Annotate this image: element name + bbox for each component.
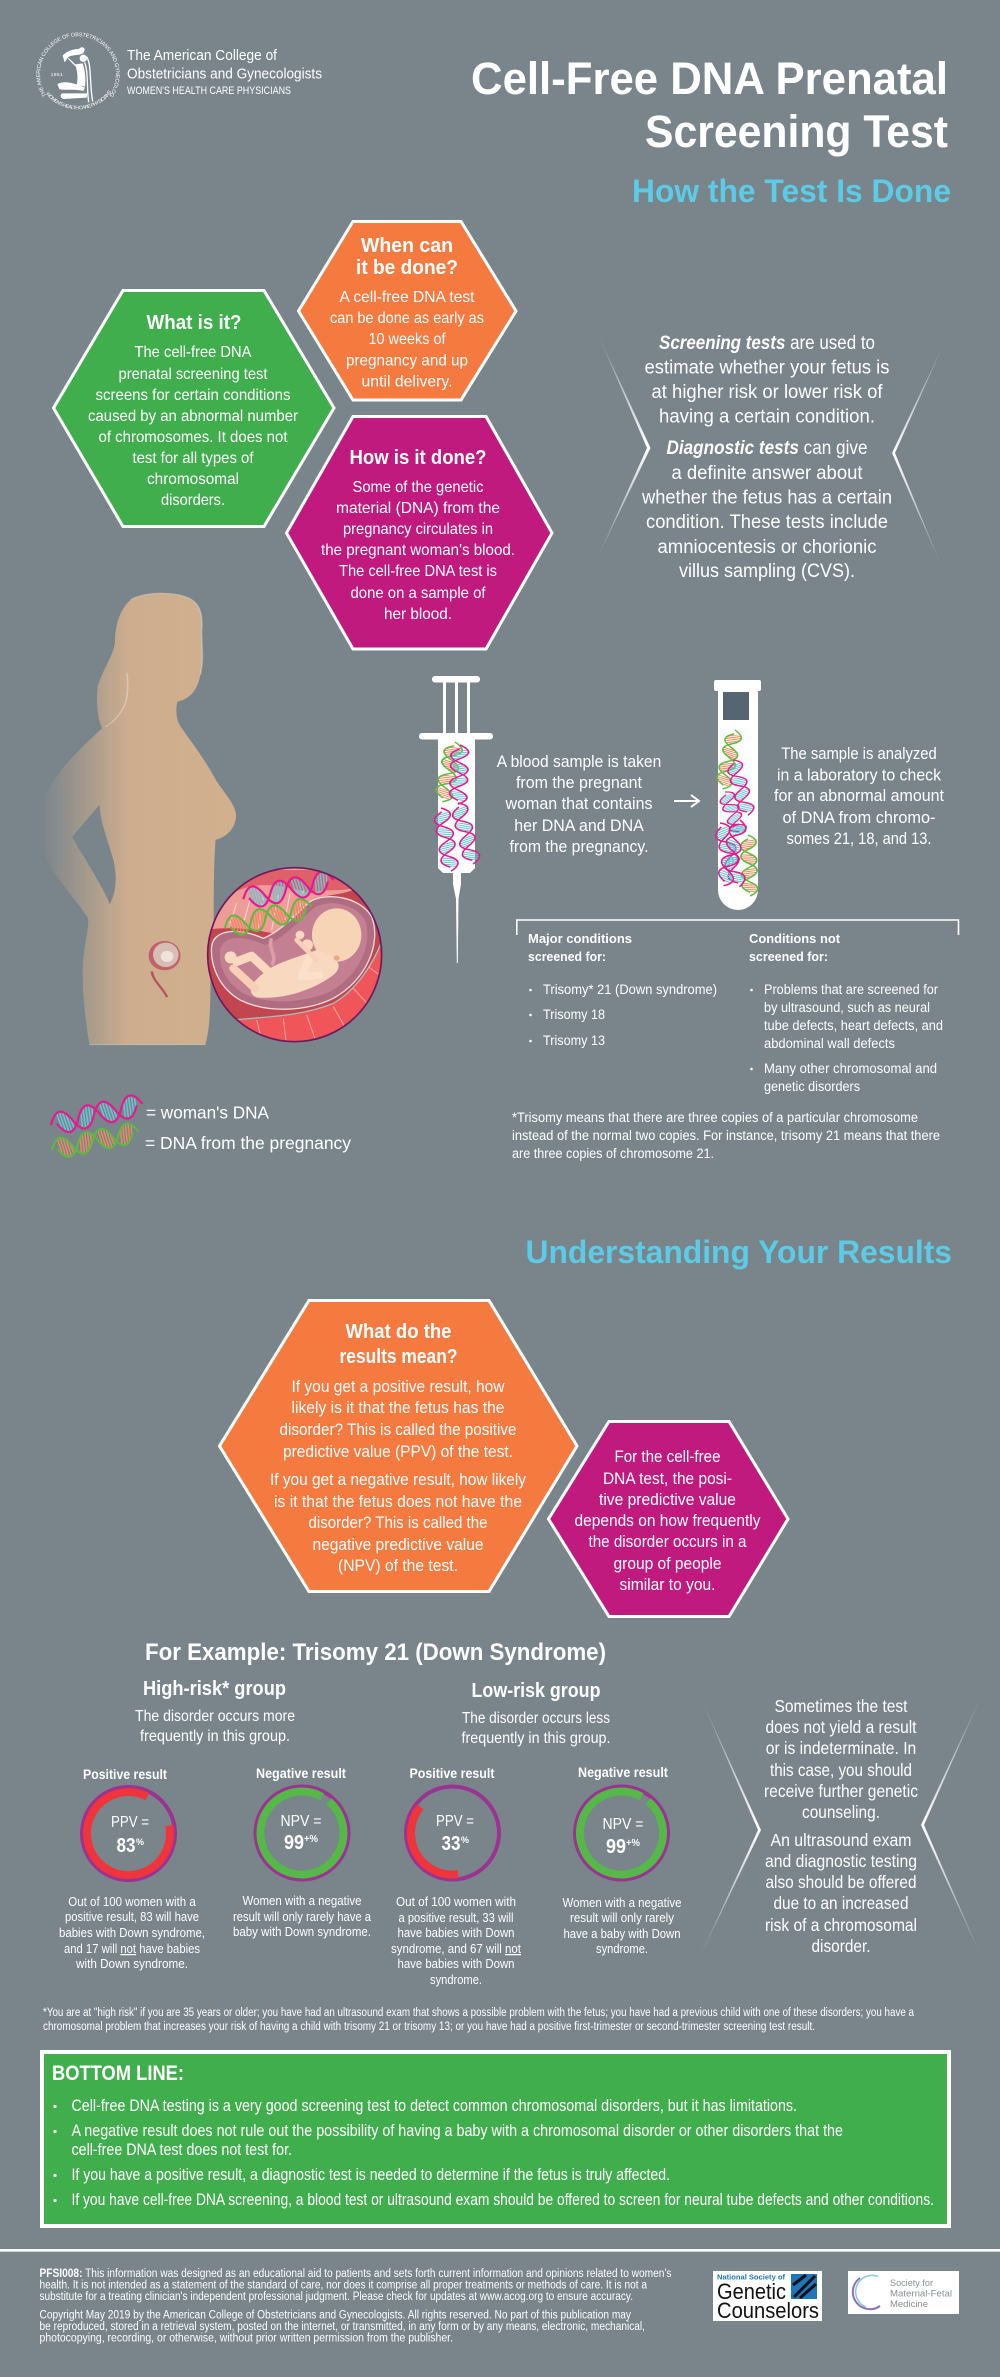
bullet points: Cell-free DNA testing is a very good screening test to detect common chromosomal disorders, but it has limitations. <box>72 2097 797 2115</box>
body text: test for all types of <box>132 450 254 467</box>
result: low risk negative: NPV = <box>602 1816 644 1833</box>
illustration: fetus in womb with DNA <box>206 866 382 1042</box>
result: high risk positive: % <box>136 1837 144 1847</box>
illustration: pregnant woman silhouette <box>40 593 236 1045</box>
body text: tive predictive value <box>599 1491 736 1509</box>
body text: The cell-free DNA <box>134 344 252 361</box>
pregnancy DNA label: = DNA from the pregnancy <box>145 1133 351 1153</box>
result: high risk negative: 99 <box>284 1832 304 1854</box>
result: low risk positive: 33 <box>442 1833 460 1855</box>
description: a positive result, 33 will <box>398 1911 514 1925</box>
description: result will only rarely <box>570 1911 675 1925</box>
screening text: at higher risk or lower risk of <box>652 382 883 403</box>
heading: results mean? <box>340 1346 458 1368</box>
magenta hexagon <box>548 1422 788 1616</box>
footnote: high risk <box>43 2007 915 2033</box>
text: blood sample <box>497 753 661 856</box>
description: positive result, 83 will have <box>65 1910 199 1924</box>
text: blood sample: her DNA and DNA <box>514 817 644 835</box>
body text: For the cell-free <box>614 1448 720 1466</box>
description <box>562 1896 682 1956</box>
screening text: estimate whether your fetus is <box>644 358 890 378</box>
donut: NPV 99 low risk <box>563 1775 680 1891</box>
logo: ACOG: Obstetricians and Gynecologists <box>127 66 322 82</box>
green helix swatch <box>50 1122 141 1160</box>
body text: pregnancy and up <box>346 352 468 370</box>
text: blood sample: from the pregnant <box>516 774 642 792</box>
body text: the pregnant woman's blood. <box>321 542 515 559</box>
body text: the disorder occurs in a <box>588 1533 747 1551</box>
logo: National Society of Genetic Counselors: Counselors <box>717 2298 819 2323</box>
body text: until delivery. <box>362 374 452 390</box>
diagnostic text: condition. These tests include <box>646 512 888 533</box>
orange hexagon <box>220 1300 577 1592</box>
diagnostic text: Diagnostic tests can give <box>666 438 868 459</box>
seal ring text: motto: WOMEN'S HEALTH CARE PHYSICIANS <box>46 90 111 110</box>
body text: her blood. <box>384 606 452 623</box>
column: major conditions: Trisomy 18 <box>543 1007 605 1022</box>
fetus <box>225 908 361 998</box>
column: major conditions: Trisomy 13 <box>543 1033 605 1048</box>
column: major conditions: Trisomy* 21 (Down syndrome) <box>543 982 717 997</box>
screening text: having a certain condition. <box>659 406 875 428</box>
text: sample analyzed: The sample is analyzed <box>781 745 937 763</box>
result: low risk negative: +% <box>626 1838 640 1849</box>
description <box>59 1895 205 1971</box>
footer: disclaimer <box>40 2268 672 2345</box>
logo: National Society of Genetic Counselors <box>713 2271 822 2323</box>
result: low risk positive <box>391 1766 521 1987</box>
body text: 10 weeks of <box>368 331 446 348</box>
donut: NPV 99 <box>244 1775 360 1891</box>
footer: disclaimer: photocopying, recording, or otherwise, without prior written permission from the publisher. <box>40 2333 453 2345</box>
bullet points: cell-free DNA test does not test for. <box>72 2141 292 2159</box>
top tissue <box>212 868 352 933</box>
left chevron <box>696 1692 761 1965</box>
logo seal: 1951 <box>51 72 63 78</box>
column: conditions not screened: Conditions not <box>749 931 841 946</box>
body: PPV: If you get a positive result, how <box>292 1378 505 1396</box>
diagnostic text: villus sampling (CVS). <box>679 561 855 582</box>
description: Women with a negative <box>242 1894 362 1908</box>
body text: also should be offered <box>766 1872 916 1892</box>
text: blood sample: A blood sample is taken <box>497 753 661 771</box>
column: conditions not screened: by ultrasound, such as neural <box>764 1000 930 1015</box>
bullet points: A negative result does not rule out the possibility of having a baby with a chromosomal disorder or other disorders that the <box>72 2122 843 2140</box>
result: low risk negative <box>562 1765 682 1956</box>
group header: low risk <box>462 1680 610 1747</box>
bullet points: If you have a positive result, a diagnostic test is needed to determine if the fetus is truly affected. <box>72 2166 670 2184</box>
heading: When can <box>361 235 453 257</box>
column: conditions not screened: Many other chromosomal and <box>764 1061 937 1076</box>
result: low risk positive: Positive result <box>410 1766 495 1781</box>
body text: caused by an abnormal number <box>88 408 299 425</box>
group header: high risk <box>135 1678 295 1745</box>
heading <box>340 1321 458 1368</box>
result: low risk negative: 99 <box>606 1836 626 1858</box>
footnote: high risk: chromosomal problem that increases your risk of having a child with trisomy 21 or trisomy 13; or you have had a positive first-trimester or second-trimester screening test result. <box>43 2021 815 2033</box>
body text: and diagnostic testing <box>765 1851 917 1871</box>
body text: Some of the genetic <box>352 479 484 496</box>
logo seal <box>51 47 93 102</box>
green box <box>42 2052 949 2226</box>
body: PPV: disorder? This is called the positive <box>280 1421 516 1439</box>
screening text <box>644 333 890 428</box>
result: high risk negative <box>233 1766 371 1939</box>
body text: disorder. <box>812 1936 870 1956</box>
heading: it be done? <box>356 257 458 279</box>
body text: this case, you should <box>770 1760 912 1780</box>
amniotic sac <box>211 897 375 1009</box>
description: Out of 100 women with a <box>68 1895 196 1909</box>
column: conditions not screened <box>749 931 943 1094</box>
heading: What is it? <box>146 312 242 334</box>
heading: how the test is done: How the Test Is Done <box>632 173 951 209</box>
pink helix swatch <box>49 1093 145 1136</box>
footnote: trisomy: instead of the normal two copies. For instance, trisomy 21 means that there <box>512 1128 940 1143</box>
bullet points <box>53 2097 934 2209</box>
left chevron <box>595 330 650 563</box>
description <box>233 1894 371 1939</box>
heading: BOTTOM LINE: <box>52 2062 184 2085</box>
woman's DNA label: = woman's DNA <box>146 1102 269 1122</box>
description: syndrome. <box>596 1942 648 1956</box>
panel: what is it <box>54 290 334 526</box>
panel: when can it be done <box>298 222 516 400</box>
body text <box>88 344 299 509</box>
title: Screening Test <box>645 106 948 157</box>
body text: does not yield a result <box>766 1717 917 1737</box>
body: NPV: If you get a negative result, how likely <box>270 1471 527 1489</box>
bracket <box>517 920 958 935</box>
description: syndrome, and 67 will not <box>391 1942 521 1956</box>
body text <box>764 1696 918 1956</box>
umbilical cord <box>270 938 274 965</box>
heading: How is it done? <box>350 447 486 469</box>
heading: understanding your results: Understanding Your Results <box>526 1234 952 1270</box>
body text: screens for certain conditions <box>96 387 290 404</box>
diagnostic text: a definite answer about <box>672 463 863 484</box>
logo: Society for Maternal-Fetal Medicine: Maternal-Fetal <box>890 2288 952 2298</box>
panel: bottom line <box>42 2052 949 2226</box>
panel: how is it done <box>286 416 552 649</box>
body text: The cell-free DNA test is <box>339 563 497 580</box>
magenta hexagon <box>286 416 552 649</box>
result: high risk positive: 83 <box>116 1835 136 1857</box>
logo: Society for Maternal-Fetal Medicine: Society for <box>890 2278 933 2288</box>
body text: or is indeterminate. In <box>766 1738 916 1758</box>
description: have a baby with Down <box>564 1927 681 1941</box>
body text: due to an increased <box>774 1893 908 1913</box>
body text: done on a sample of <box>350 585 486 602</box>
right chevron <box>892 337 947 572</box>
description: and 17 will not have babies <box>64 1942 200 1956</box>
body: PPV <box>280 1378 516 1461</box>
body: NPV: (NPV) of the test. <box>338 1557 458 1575</box>
body text: An ultrasound exam <box>770 1830 912 1850</box>
body text: depends on how frequently <box>574 1512 761 1530</box>
green hexagon <box>54 290 334 526</box>
body text: pregnancy circulates in <box>343 521 493 538</box>
body: NPV <box>270 1471 527 1575</box>
group header: high risk: The disorder occurs more <box>135 1708 295 1725</box>
body text: A cell-free DNA test <box>340 289 475 306</box>
description: Out of 100 women with <box>396 1895 516 1909</box>
body text: chromosomal <box>147 471 239 488</box>
description <box>391 1895 521 1987</box>
panel: conditions lists <box>517 920 958 1094</box>
body: PPV: predictive value (PPV) of the test. <box>283 1443 513 1461</box>
description: babies with Down syndrome, <box>59 1926 205 1940</box>
arrow <box>674 795 699 807</box>
icon: syringe <box>419 676 493 963</box>
donut: PPV 33 <box>406 1786 499 1880</box>
footer: disclaimer: substitute for a treating clinician's independent professional judgment. Please check for updates at www.acog.org to ensure accuracy. <box>40 2291 633 2303</box>
title: Cell-Free DNA Prenatal <box>471 53 948 104</box>
logo: Society for Maternal-Fetal Medicine: Medicine <box>890 2299 928 2309</box>
footnote: trisomy: *Trisomy means that there are three copies of a particular chromosome <box>512 1110 918 1125</box>
orange hexagon <box>298 222 516 400</box>
logo: National Society of Genetic Counselors: National Society of <box>717 2272 786 2282</box>
panel: indeterminate results <box>696 1688 985 1965</box>
column: major conditions: Major conditions <box>528 931 632 946</box>
diagnostic text: whether the fetus has a certain <box>641 488 892 508</box>
footer: disclaimer: health. It is not intended as a statement of the standard of care, nor does it comprise all proper treatments or methods of care. It is not a <box>40 2280 648 2292</box>
body: NPV: negative predictive value <box>312 1536 484 1554</box>
result: high risk positive: PPV = <box>111 1814 149 1831</box>
group header: low risk: The disorder occurs less <box>462 1710 610 1727</box>
panel: what do the results mean <box>220 1300 577 1592</box>
result: high risk negative: NPV = <box>280 1813 322 1830</box>
panel: positive predictive value depends <box>548 1422 788 1616</box>
body text: Sometimes the test <box>774 1696 908 1716</box>
group header: high risk: frequently in this group. <box>140 1728 290 1745</box>
group header: low risk: frequently in this group. <box>462 1730 610 1747</box>
body text: material (DNA) from the <box>336 500 500 517</box>
body text: can be done as early as <box>330 310 484 327</box>
result: low risk negative: Negative result <box>578 1765 668 1780</box>
body text: counseling. <box>802 1802 880 1822</box>
column: conditions not screened: Problems that are screened for <box>764 982 938 997</box>
footer: disclaimer: Copyright May 2019 by the American College of Obstetricians and Gynecologists. All rights reserved. No part of this publication may <box>40 2310 631 2322</box>
column: conditions not screened: tube defects, heart defects, and <box>764 1018 943 1033</box>
description: baby with Down syndrome. <box>233 1925 371 1939</box>
description: Women with a negative <box>562 1896 682 1910</box>
result: high risk positive: Positive result <box>83 1767 167 1782</box>
body: NPV: disorder? This is called the <box>308 1514 488 1532</box>
group header: high risk: High-risk* group <box>143 1678 286 1700</box>
logo: ACOG <box>36 32 322 110</box>
body text: receive further genetic <box>764 1781 918 1801</box>
diagnostic text <box>641 438 892 582</box>
legend: DNA <box>49 1093 351 1160</box>
result: high risk positive <box>59 1767 205 1971</box>
result: low risk positive: % <box>461 1835 469 1845</box>
column: conditions not screened: screened for: <box>749 949 828 964</box>
right chevron <box>921 1688 985 1965</box>
result: high risk negative: Negative result <box>256 1766 346 1781</box>
body text: prenatal screening test <box>118 366 268 383</box>
result: low risk positive: PPV = <box>436 1813 474 1830</box>
group header: low risk: Low-risk group <box>472 1680 600 1702</box>
icon: test tube <box>712 680 761 910</box>
bottom tissue <box>238 946 381 1041</box>
logo: National Society of Genetic Counselors: Genetic <box>717 2279 786 2304</box>
body text <box>574 1448 761 1594</box>
description: have babies with Down <box>398 1926 515 1940</box>
DNA in placenta <box>242 872 334 908</box>
description: result will only rarely have a <box>233 1910 371 1924</box>
diagnostic text: amniocentesis or chorionic <box>658 537 876 558</box>
small uterus <box>149 941 180 997</box>
logo name: The American College of <box>127 47 278 64</box>
text: sample analyzed: in a laboratory to check <box>777 766 942 784</box>
body text: similar to you. <box>620 1576 716 1594</box>
text: sample analyzed: of DNA from chromo- <box>782 809 936 827</box>
body text: of chromosomes. It does not <box>98 429 288 446</box>
text: blood sample: woman that contains <box>505 795 652 813</box>
body text: group of people <box>614 1555 722 1573</box>
description: have babies with Down <box>398 1957 515 1971</box>
description: syndrome. <box>430 1973 482 1987</box>
body text: disorders. <box>161 492 225 509</box>
column: conditions not screened: genetic disorders <box>764 1079 860 1094</box>
heading: What do the <box>346 1321 452 1343</box>
column: major conditions: screened for: <box>528 949 606 964</box>
body: NPV: is it that the fetus does not have the <box>274 1493 522 1511</box>
body text <box>321 479 515 623</box>
text: blood sample: from the pregnancy. <box>510 838 648 856</box>
text: sample analyzed: for an abnormal amount <box>774 787 944 805</box>
body text <box>330 289 484 390</box>
body text: DNA test, the posi- <box>603 1470 732 1488</box>
result: high risk negative: +% <box>304 1834 318 1845</box>
description: with Down syndrome. <box>75 1957 188 1971</box>
text: sample analyzed: somes 21, 18, and 13. <box>786 830 932 848</box>
panel: screening vs diagnostic tests <box>595 330 947 582</box>
text: sample analyzed <box>774 745 944 848</box>
logo: Society for Maternal-Fetal Medicine <box>848 2271 959 2314</box>
column: major conditions <box>528 931 717 1048</box>
column: conditions not screened: abdominal wall defects <box>764 1036 895 1051</box>
footnote: trisomy: are three copies of chromosome 21. <box>512 1146 714 1161</box>
logo: ACOG: WOMEN'S HEALTH CARE PHYSICIANS <box>127 85 291 97</box>
heading: example: For Example: Trisomy 21 (Down Syndrome) <box>145 1639 606 1666</box>
body text: risk of a chromosomal <box>765 1915 917 1935</box>
heading <box>356 235 458 279</box>
footer: disclaimer: be reproduced, stored in a retrieval system, posted on the internet, or transmitted, in any form or by any means, electronic, mechanical, <box>40 2321 645 2333</box>
body: PPV: likely is it that the fetus has the <box>292 1399 504 1417</box>
screening text: Screening tests are used to <box>659 333 875 354</box>
title <box>471 53 948 157</box>
donut: PPV 83 <box>80 1785 177 1882</box>
footnote: trisomy <box>512 1110 940 1161</box>
footer: disclaimer: PFSI008: This information was designed as an educational aid to patients and sets forth current information and opinions related to women's <box>40 2268 672 2280</box>
